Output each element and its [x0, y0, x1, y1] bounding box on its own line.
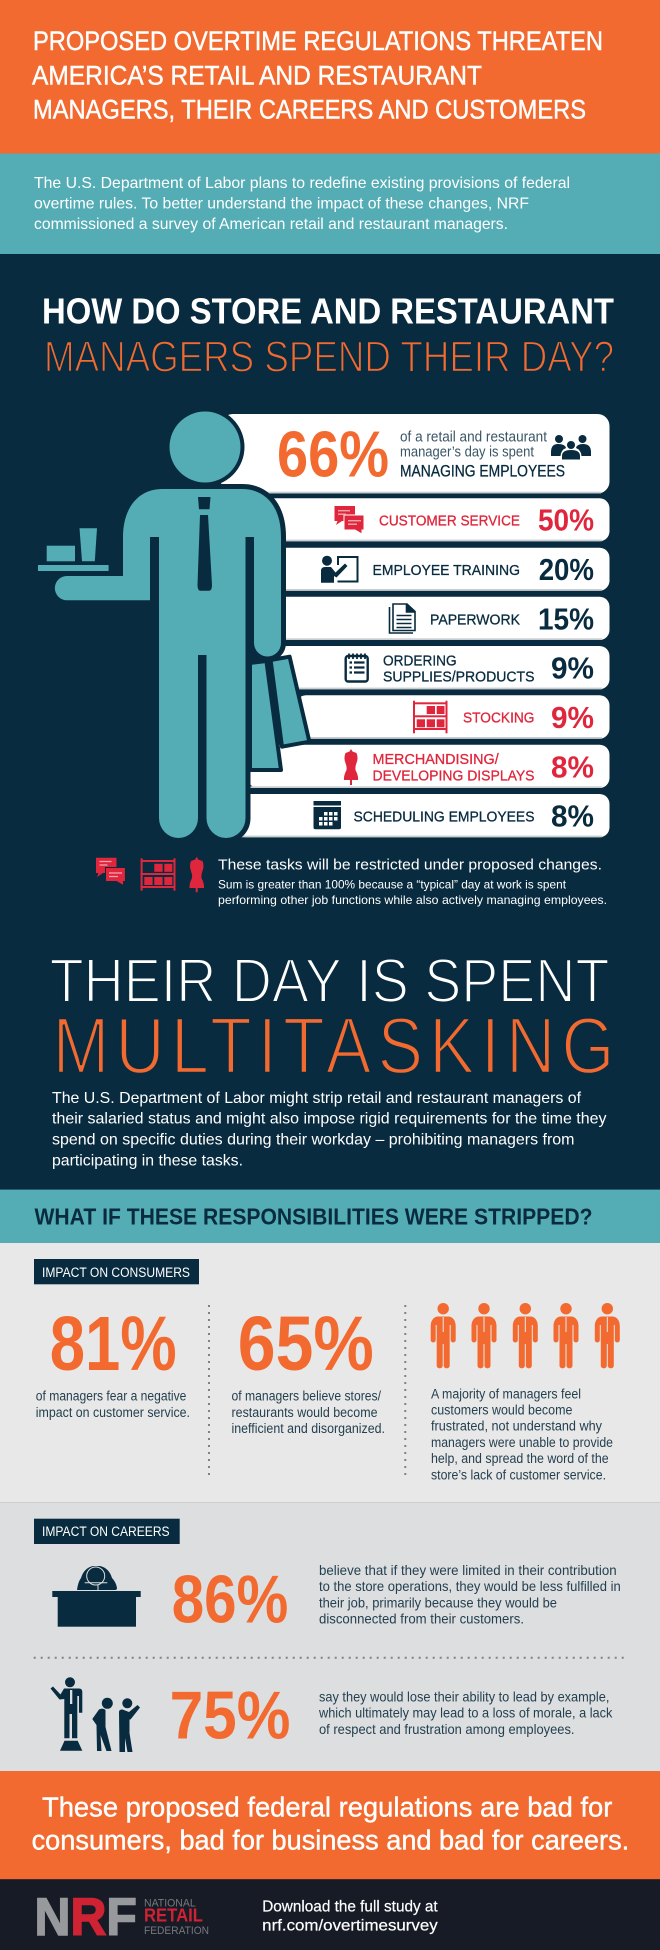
description [400, 429, 565, 481]
majority text: frustrated, not understand why [431, 1419, 602, 1434]
75% description: say they would lose their ability to lead by example, [319, 1689, 609, 1705]
75% description: which ultimately may lead to a loss of morale, a lack [318, 1705, 613, 1721]
description: of a retail and restaurant [400, 429, 548, 446]
heading: their day is spent multitasking: THEIR DAY IS SPENT [50, 947, 609, 1016]
label: ORDERING [383, 652, 457, 669]
label: EMPLOYEE TRAINING [372, 562, 520, 579]
panel: scheduling employees 8% [236, 794, 610, 837]
panel: employee training 20% [262, 548, 610, 591]
multitasking paragraph: participating in these tasks. [52, 1153, 243, 1170]
label [372, 751, 534, 784]
stat: 81%: impact on customer service. [36, 1405, 190, 1420]
footer [0, 1879, 660, 1950]
head [170, 412, 240, 482]
NRF logo: NRF [34, 1888, 137, 1947]
conclusion text: These proposed federal regulations are bad for [42, 1792, 612, 1823]
86% description: their job, primarily because they would be [319, 1594, 557, 1610]
stat: 65%: of managers believe stores/ [232, 1389, 381, 1404]
legend text: Sum is greater than 100% because a “typical” day at work is spent [218, 878, 567, 892]
conclusion banner [0, 1771, 660, 1879]
icon: calendar [314, 801, 341, 829]
label [383, 652, 534, 686]
intro text: commissioned a survey of American retail and restaurant managers. [34, 216, 508, 233]
icon: group of people [551, 435, 591, 460]
panel: paperwork 15% [262, 597, 610, 640]
title text: MANAGERS, THEIR CAREERS AND CUSTOMERS [33, 94, 586, 124]
tray with box and glass [38, 528, 109, 571]
tag [34, 1519, 180, 1544]
tag: IMPACT ON CONSUMERS [42, 1265, 190, 1280]
legend text [218, 856, 607, 907]
icon: manager figure with tray and shopping bag [38, 412, 309, 838]
NRF logo [34, 1888, 209, 1947]
panel: customer service 50% [262, 498, 610, 541]
conclusion text: consumers, bad for business and bad for careers. [32, 1824, 629, 1855]
multitasking paragraph: The U.S. Department of Labor might strip retail and restaurant managers of [52, 1090, 582, 1107]
icon: leader on podium with followers [50, 1677, 140, 1752]
title banner [0, 0, 660, 154]
icon: clipboard [346, 654, 368, 682]
legend: restricted tasks [96, 856, 607, 907]
download link text: Download the full study at [262, 1898, 438, 1915]
multitasking paragraph [52, 1090, 606, 1170]
stat: 81%: of managers fear a negative [36, 1389, 186, 1404]
intro text: overtime rules. To better understand the impact of these changes, NRF [34, 195, 529, 212]
stat: 8% [551, 749, 594, 784]
panel: merchandising 8% [248, 745, 610, 788]
necktie [198, 497, 212, 591]
stat: 9% [551, 700, 594, 735]
stat: 20% [539, 552, 594, 587]
conclusion text [32, 1792, 629, 1855]
NRF logo: FEDERATION [144, 1925, 209, 1937]
dotted divider [34, 1657, 627, 1659]
legend text: performing other job functions while also actively managing employees. [218, 893, 607, 907]
label: STOCKING [463, 710, 534, 727]
label: SUPPLIES/PRODUCTS [383, 669, 534, 686]
panel: impact on consumers [0, 1243, 660, 1503]
NRF logo: NATIONAL [144, 1898, 196, 1910]
stat: 81% [36, 1301, 190, 1420]
stat: 65%: inefficient and disorganized. [232, 1421, 385, 1436]
majority text [431, 1387, 613, 1482]
75% description [318, 1689, 613, 1737]
majority text: help, and spread the word of the [431, 1451, 609, 1466]
multitasking paragraph: spend on specific duties during their workday – prohibiting managers from [52, 1132, 574, 1149]
multitasking paragraph: their salaried status and might also impose rigid requirements for the time they [52, 1111, 606, 1128]
heading: how do managers spend their day: HOW DO STORE AND RESTAURANT [42, 290, 614, 331]
intro text [34, 175, 570, 233]
majority text: customers would become [431, 1403, 572, 1418]
panel: ordering supplies 9% [276, 646, 610, 689]
86% description [319, 1562, 621, 1626]
86% description: believe that if they were limited in their contribution [319, 1562, 617, 1578]
label: MERCHANDISING/ [372, 751, 499, 768]
icon: shelves [413, 701, 448, 733]
icon: manager slumped at desk [52, 1566, 141, 1627]
dotted dividers [209, 1305, 405, 1477]
heading: their day is spent multitasking [50, 947, 614, 1090]
stat: 66%: 66% [277, 418, 389, 491]
icon: shelves [141, 858, 176, 891]
label: DEVELOPING DISPLAYS [372, 767, 534, 784]
icon: speech bubbles [96, 858, 125, 886]
label: CUSTOMER SERVICE [379, 512, 520, 529]
majority text: managers were unable to provide [431, 1435, 613, 1450]
icon: dress form [190, 857, 204, 892]
description: MANAGING EMPLOYEES [400, 462, 565, 481]
stat: 81%: 81% [50, 1301, 177, 1387]
download link text [262, 1898, 438, 1935]
tag: IMPACT ON CAREERS [42, 1524, 170, 1539]
label: PAPERWORK [430, 611, 520, 628]
icon: training board [321, 556, 358, 583]
band heading: WHAT IF THESE RESPONSIBILITIES WERE STRIPPED? [34, 1203, 592, 1229]
stat: 65%: restaurants would become [232, 1405, 378, 1420]
stat: 65%: 65% [238, 1301, 374, 1387]
icon row: five managers [431, 1303, 620, 1368]
title text: PROPOSED OVERTIME REGULATIONS THREATEN [33, 26, 603, 56]
band: what if stripped [0, 1190, 660, 1243]
75% description: of respect and frustration among employees. [319, 1721, 574, 1737]
icon: speech bubbles [334, 506, 364, 534]
stat: 65% [232, 1301, 385, 1436]
legend text: These tasks will be restricted under proposed changes. [218, 856, 602, 873]
icon: dress form [344, 749, 358, 785]
majority text: store’s lack of customer service. [431, 1467, 606, 1482]
NRF logo: RETAIL [144, 1906, 203, 1926]
heading: how do managers spend their day [42, 290, 614, 382]
description: manager’s day is spent [400, 444, 535, 461]
title text: AMERICA’S RETAIL AND RESTAURANT [32, 60, 482, 90]
tag [34, 1259, 199, 1284]
panel: stocking 9% [296, 695, 610, 739]
download link text: nrf.com/overtimesurvey [262, 1918, 438, 1935]
stat: 86%: 86% [172, 1562, 288, 1638]
intro band [0, 154, 660, 254]
intro text: The U.S. Department of Labor plans to redefine existing provisions of federal [34, 175, 570, 192]
86% description: to the store operations, they would be less fulfilled in [319, 1578, 621, 1594]
icon: document [390, 604, 415, 633]
stat: 9% [551, 651, 594, 686]
body [55, 489, 281, 838]
panel: managing employees 66% [221, 414, 610, 494]
stat: 75%: 75% [170, 1677, 290, 1753]
panel: impact on careers [0, 1503, 660, 1771]
stat: 50% [538, 503, 594, 538]
majority text: A majority of managers feel [431, 1387, 581, 1402]
shopping bag [250, 657, 309, 770]
stat: 8% [551, 799, 594, 834]
86% description: disconnected from their customers. [319, 1610, 524, 1626]
stat: 15% [538, 601, 594, 636]
heading: their day is spent multitasking: MULTITASKING [53, 1001, 614, 1090]
label: SCHEDULING EMPLOYEES [354, 809, 534, 826]
title text [32, 26, 603, 124]
